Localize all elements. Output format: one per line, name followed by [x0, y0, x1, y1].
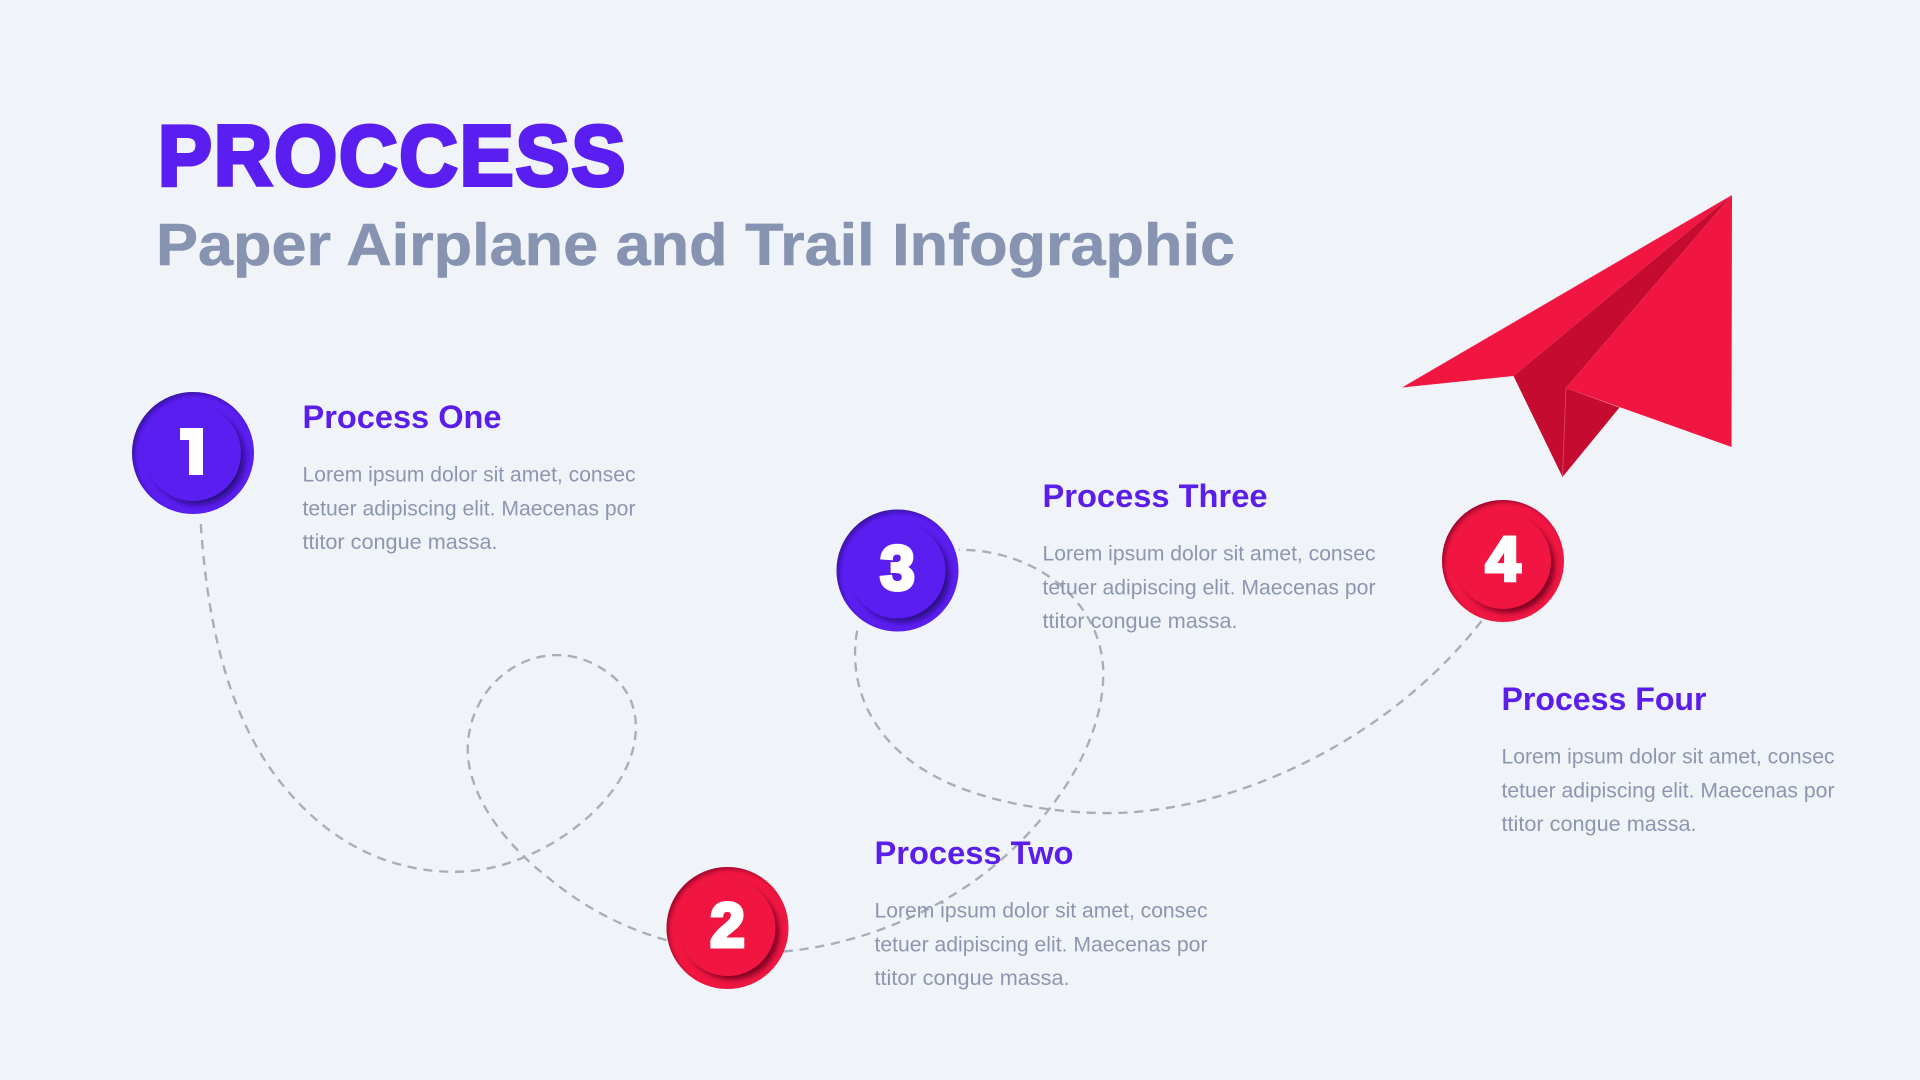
step 3 text	[1042, 478, 1376, 633]
step 2 body: tetuer adipiscing elit. Maecenas por	[874, 934, 1208, 956]
step 1 body: Lorem ipsum dolor sit amet, consec	[302, 464, 636, 486]
infographic canvas	[132, 124, 1834, 990]
step 3 badge: 3	[880, 534, 915, 604]
step 4 heading: Process Four	[1502, 681, 1706, 717]
step 2 body: Lorem ipsum dolor sit amet, consec	[874, 900, 1208, 922]
step 4 body: ttitor congue massa.	[1502, 813, 1696, 836]
step 4 body: tetuer adipiscing elit. Maecenas por	[1502, 780, 1834, 802]
title: PROCCESS	[158, 108, 625, 203]
step 4 badge	[1442, 500, 1564, 622]
step 4 body	[1502, 746, 1834, 836]
step 2 body: ttitor congue massa.	[874, 967, 1070, 990]
step 2 badge: 2	[710, 892, 745, 960]
step 4 body: Lorem ipsum dolor sit amet, consec	[1502, 746, 1834, 768]
step 3 body: tetuer adipiscing elit. Maecenas por	[1042, 576, 1376, 600]
step 2 badge	[666, 867, 788, 989]
step 4 badge: 4	[1486, 525, 1521, 594]
step 2 text	[874, 835, 1208, 990]
step 3 body: ttitor congue massa.	[1042, 610, 1238, 633]
step 2 body	[874, 900, 1208, 990]
step 1 body: tetuer adipiscing elit. Maecenas por	[302, 498, 636, 520]
step 1 text	[302, 399, 636, 554]
step 4 text	[1502, 681, 1834, 836]
step 1 badge: 1	[173, 411, 213, 491]
step 1 body	[302, 464, 636, 554]
subtitle: Paper Airplane and Trail Infographic	[156, 212, 1235, 278]
step 1 heading: Process One	[302, 399, 502, 435]
step 3 heading: Process Three	[1042, 478, 1268, 514]
step 3 body	[1042, 542, 1376, 633]
step 2 heading: Process Two	[874, 835, 1074, 871]
dashed flight trail	[201, 524, 1482, 951]
step 1 badge	[132, 392, 254, 514]
step 3 badge	[836, 510, 958, 632]
step 1 body: ttitor congue massa.	[302, 531, 498, 554]
paper airplane	[1402, 195, 1732, 477]
step 3 body: Lorem ipsum dolor sit amet, consec	[1042, 542, 1376, 566]
